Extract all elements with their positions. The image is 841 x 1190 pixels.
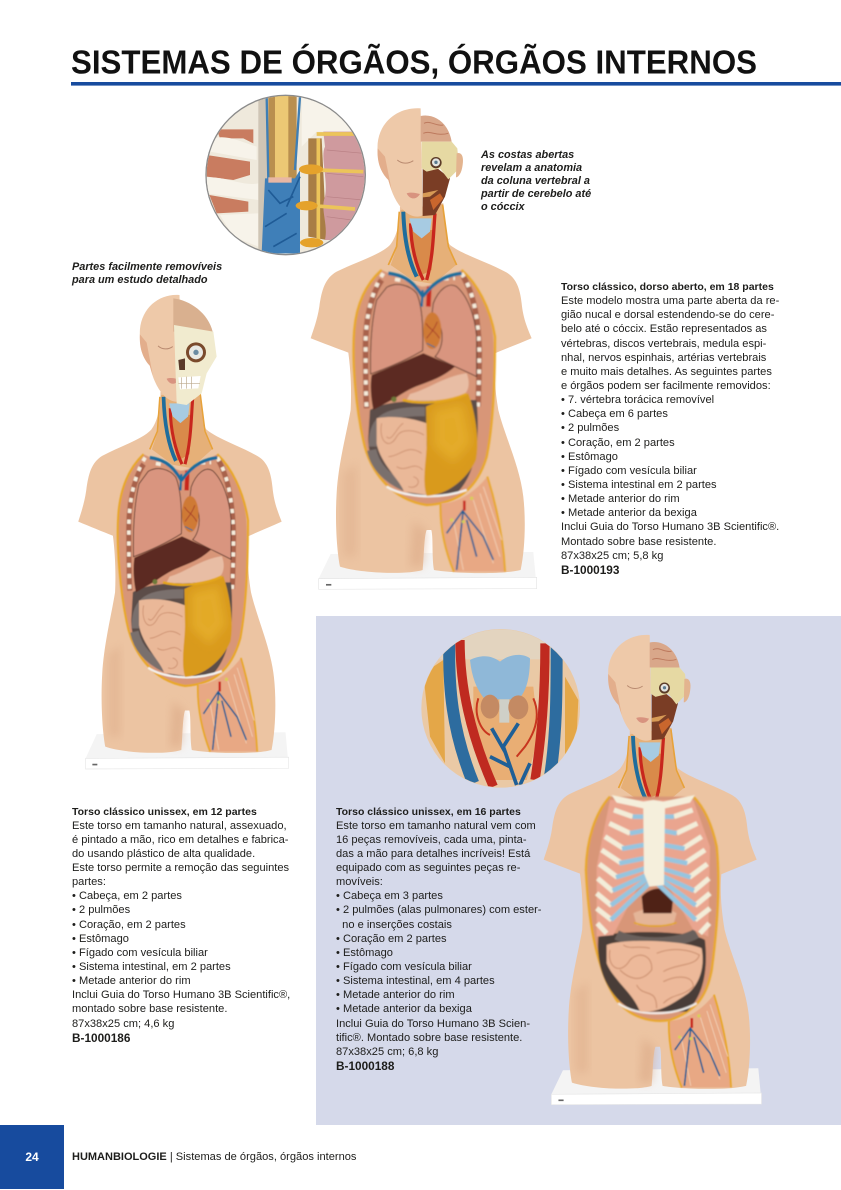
text block: 12-part torso: partes: [72, 876, 106, 888]
text block: 18-part torso: • Fígado com vesícula biliar [561, 465, 697, 477]
text block: 16-part torso: tific®. Montado sobre base resistente. [336, 1032, 522, 1044]
text block: 16-part torso: 87x38x25 cm; 6,8 kg [336, 1046, 438, 1058]
torso: 16 parts, unisex with rib cage [544, 635, 762, 1105]
text block: 18-part torso: • Metade anterior da bexiga [561, 507, 697, 519]
footer page number tab: 24 [25, 1150, 39, 1164]
text block: 12-part torso: • Sistema intestinal, em 2 partes [72, 961, 231, 973]
title rule [71, 82, 841, 86]
text block: 12-part torso: • Estômago [72, 933, 129, 945]
caption: open back: revelam a anatomia [481, 162, 582, 174]
text block: 18-part torso: e órgãos podem ser facilmente removidos: [561, 380, 771, 392]
text block: 18-part torso: Torso clássico, dorso aberto, em 18 partes [561, 281, 774, 293]
caption: open back [480, 149, 591, 213]
caption: open back: o cóccix [481, 201, 525, 213]
panel: lilac background for 16-part torso [316, 616, 841, 1125]
text block: 18-part torso: Inclui Guia do Torso Humano 3B Scientific®. [561, 521, 779, 533]
torso: 18 parts, open back [311, 108, 537, 589]
text block: 16-part torso: • Cabeça em 3 partes [336, 890, 443, 902]
text block: 18-part torso: Montado sobre base resistente. [561, 536, 716, 548]
text block: 16-part torso: • Sistema intestinal, em 4 partes [336, 975, 495, 987]
text block: 16-part torso: B-1000188 [336, 1059, 394, 1073]
text block: 16-part torso: 16 peças removíveis, cada uma, pinta- [336, 834, 527, 846]
text block: 18-part torso: e muito mais detalhes. As seguintes partes [561, 366, 772, 378]
text block: 18-part torso: belo até o cóccix. Estão representados as [561, 323, 767, 335]
text block: 16-part torso: movíveis: [336, 876, 383, 888]
text block: 12-part torso: Este torso em tamanho natural, assexuado, [72, 820, 287, 832]
text block: 12-part torso: 87x38x25 cm; 4,6 kg [72, 1018, 174, 1030]
text block: 16-part torso: • Metade anterior do rim [336, 989, 455, 1001]
text block: 12-part torso: • Coração, em 2 partes [72, 919, 186, 931]
text block: 18-part torso: • 7. vértebra torácica removível [561, 394, 714, 406]
text block: 16-part torso: Torso clássico unissex, em 16 partes [336, 806, 521, 818]
caption: open back: da coluna vertebral a [481, 175, 590, 187]
text block: 12-part torso: • 2 pulmões [72, 904, 130, 916]
text block: 16-part torso: Este torso em tamanho natural vem com [336, 820, 536, 832]
text block: 16-part torso: • Fígado com vesícula biliar [336, 961, 472, 973]
text block: 18-part torso: vértebras, discos vertebrais, medula espi- [561, 338, 766, 350]
text block: 12-part torso: B-1000186 [72, 1031, 130, 1045]
detail circle: neck vessels [421, 629, 585, 788]
text block: 12-part torso: do usando plástico de alta qualidade. [72, 848, 255, 860]
text block: 16-part torso: • Coração em 2 partes [336, 933, 447, 945]
text block: 18-part torso: • Sistema intestinal em 2 partes [561, 479, 717, 491]
text block: 18-part torso: 87x38x25 cm; 5,8 kg [561, 550, 663, 562]
text block: 16-part torso: • Estômago [336, 947, 393, 959]
text block: 12-part torso: • Metade anterior do rim [72, 975, 191, 987]
text block: 18-part torso: • Estômago [561, 451, 618, 463]
text block: 16-part torso: • 2 pulmões (alas pulmonares) com ester- [336, 904, 542, 916]
text block: 12-part torso: • Fígado com vesícula biliar [72, 947, 208, 959]
text block: 18-part torso: Este modelo mostra uma parte aberta da re- [561, 295, 779, 307]
caption: open back: As costas abertas [481, 149, 574, 161]
footer text: HUMANBIOLOGIE | Sistemas de órgãos, órgãos internos [72, 1151, 356, 1163]
text block: 16-part torso: • Metade anterior da bexiga [336, 1003, 472, 1015]
text block: 18-part torso: nhal, nervos espinhais, artérias vertebrais [561, 352, 766, 364]
torso: 12 parts, unisex [78, 295, 289, 769]
text block: 12-part torso: Este torso permite a remoção das seguintes [72, 862, 289, 874]
text block: 18-part torso [561, 281, 779, 577]
caption: removable parts: Partes facilmente removíveis [72, 261, 222, 273]
text block: 12-part torso [72, 806, 290, 1045]
title: SISTEMAS DE ÓRGÃOS, ÓRGÃOS INTERNOS [71, 44, 757, 80]
text block: 16-part torso: no e inserções costais [342, 919, 452, 931]
text block: 12-part torso: • Cabeça, em 2 partes [72, 890, 182, 902]
text block: 12-part torso: Inclui Guia do Torso Humano 3B Scientific®, [72, 989, 290, 1001]
text block: 16-part torso: Inclui Guia do Torso Humano 3B Scien- [336, 1018, 530, 1030]
text block: 18-part torso: gião nucal e dorsal estendendo-se do cere- [561, 309, 774, 321]
text block: 16-part torso [336, 806, 542, 1073]
text block: 18-part torso: • Coração, em 2 partes [561, 437, 675, 449]
rib cage [597, 800, 710, 937]
caption: open back: partir de cerebelo até [481, 188, 591, 200]
icon: exposed skull half [173, 298, 217, 405]
text block: 18-part torso: • Cabeça em 6 partes [561, 408, 668, 420]
caption: removable parts [72, 261, 222, 286]
text block: 16-part torso: das a mão para detalhes incríveis! Está [336, 848, 530, 860]
text block: 16-part torso: equipado com as seguintes peças re- [336, 862, 520, 874]
text block: 12-part torso: montado sobre base resistente. [72, 1003, 227, 1015]
text block: 18-part torso: B-1000193 [561, 563, 619, 577]
caption: removable parts: para um estudo detalhado [72, 274, 208, 286]
text block: 18-part torso: • Metade anterior do rim [561, 493, 680, 505]
detail circle: open back spine [206, 90, 367, 257]
text block: 18-part torso: • 2 pulmões [561, 422, 619, 434]
footer page number tab [0, 1125, 64, 1189]
text block: 12-part torso: Torso clássico unissex, em 12 partes [72, 806, 257, 818]
text block: 12-part torso: é pintado a mão, rico em detalhes e fabrica- [72, 834, 288, 846]
